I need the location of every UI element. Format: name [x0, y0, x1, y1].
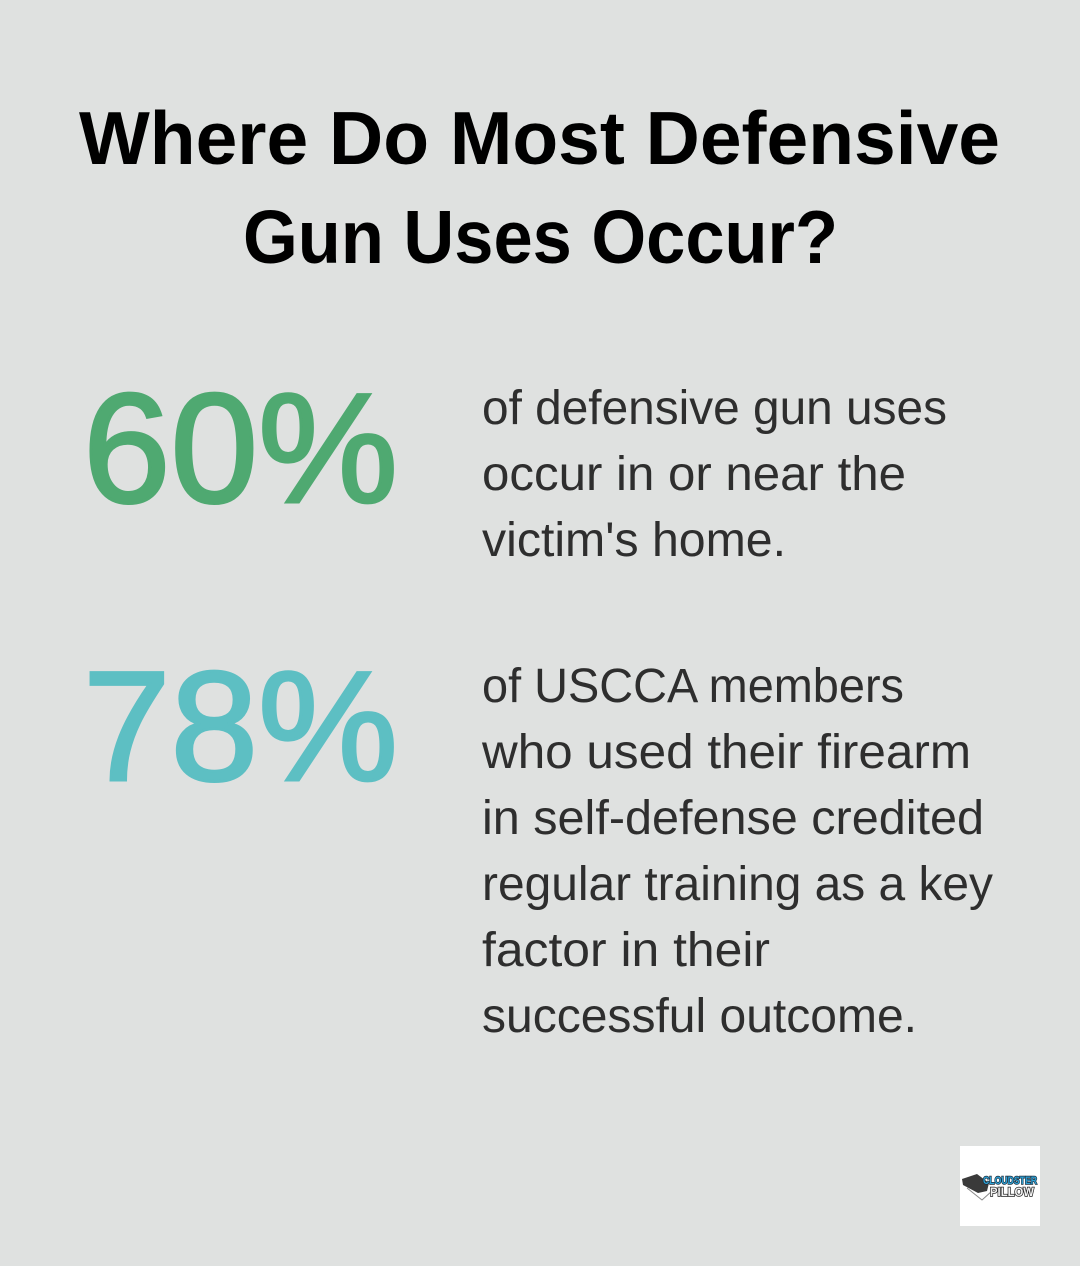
text block: 60% description: of defensive gun uses — [482, 382, 947, 435]
logo wordmark: CLOUDSTER — [983, 1175, 1037, 1187]
statistic: 60%: 60% — [83, 362, 398, 536]
title: Gun Uses Occur? — [243, 195, 838, 279]
text block: 78% description: of USCCA members — [482, 660, 904, 713]
icon: pillow — [962, 1174, 992, 1200]
text block: 78% description — [481, 660, 993, 1043]
logo wordmark — [983, 1175, 1037, 1199]
text block: 78% description: who used their firearm — [481, 726, 971, 779]
statistic: 78%: 78% — [83, 640, 398, 814]
logo wordmark: PILLOW — [990, 1185, 1035, 1199]
text block: 78% description: factor in their — [482, 924, 770, 977]
title — [79, 96, 1000, 279]
text block: 78% description: successful outcome. — [482, 990, 917, 1043]
text block: 78% description: in self-defense credited — [482, 792, 984, 845]
title: Where Do Most Defensive — [79, 96, 1000, 180]
text block: 78% description: regular training as a key — [482, 858, 993, 911]
logo: Cloudster Pillow — [960, 1146, 1040, 1226]
text block: 60% description: victim's home. — [482, 514, 786, 567]
text block: 60% description: occur in or near the — [482, 448, 906, 501]
text block: 60% description — [482, 382, 947, 567]
